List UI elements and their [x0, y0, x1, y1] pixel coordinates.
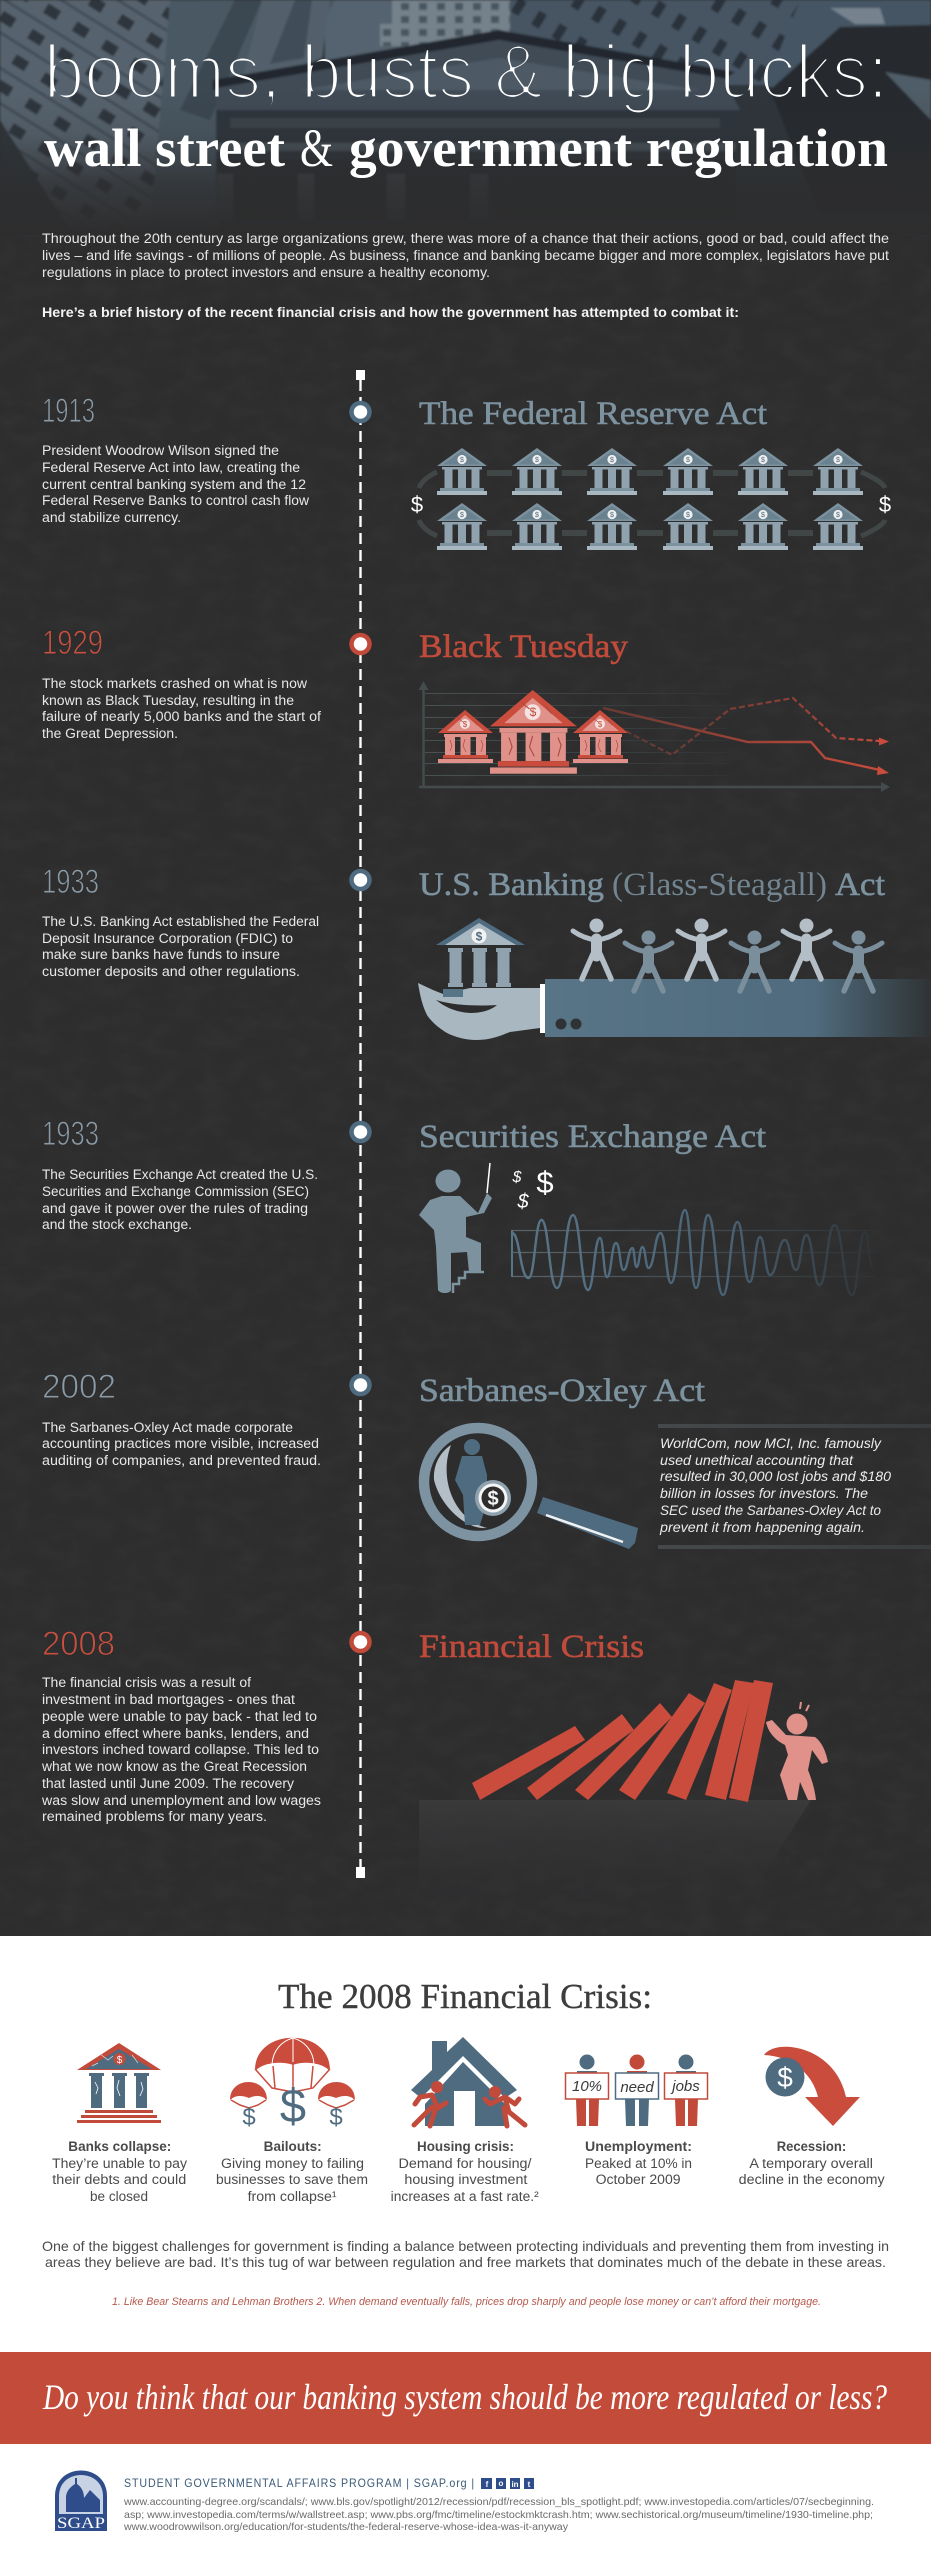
icon: bailouts parachutes: $ — [280, 2079, 306, 2132]
icon: ring of twelve reserve banks: $ — [535, 457, 539, 464]
sources — [123, 2496, 874, 2533]
heading: (Glass-Steagall) — [612, 867, 827, 903]
description: the Great Depression. — [42, 726, 178, 741]
description: failure of nearly 5,000 banks and the start of — [42, 709, 321, 724]
title — [44, 30, 888, 178]
timeline node — [352, 403, 370, 421]
description: investment in bad mortgages - ones that — [42, 1692, 295, 1707]
ledge — [419, 1800, 811, 1920]
year: 1913 — [42, 392, 95, 430]
description: President Woodrow Wilson signed the — [42, 443, 279, 458]
cuff — [540, 984, 545, 1033]
description: Federal Reserve Banks to control cash flow — [42, 493, 309, 508]
callout: WorldCom: SEC used the Sarbanes-Oxley Act to — [660, 1503, 881, 1518]
description: The financial crisis was a result of — [42, 1675, 251, 1690]
text: recession — [739, 2139, 885, 2187]
chart: stock market crash: $ — [463, 720, 468, 729]
callout: WorldCom: billion in losses for investors. The — [660, 1486, 868, 1501]
description: remained problems for many years. — [42, 1809, 267, 1824]
intro text: regulations in place to protect investors and ensure a healthy economy. — [42, 264, 490, 280]
wave chart — [511, 1210, 875, 1295]
icon: recession arrow — [764, 2047, 860, 2126]
text: banks collapse: They’re unable to pay — [52, 2156, 187, 2171]
callout: WorldCom — [658, 1424, 931, 1549]
icon: ring of twelve reserve banks: $ — [836, 512, 840, 519]
icon: bailouts parachutes — [230, 2038, 355, 2132]
icon: ring of twelve reserve banks: $ — [686, 457, 690, 464]
chart: stock market crash: $ — [530, 705, 537, 719]
callout: WorldCom: resulted in 30,000 lost jobs and $180 — [660, 1469, 892, 1484]
description: a domino effect where banks, lenders, and — [42, 1726, 309, 1741]
dominoes — [472, 1680, 773, 1802]
description: and stabilize currency. — [42, 510, 181, 525]
hand — [418, 983, 540, 1040]
closing paragraph — [42, 2238, 889, 2270]
icon: unemployment signs — [566, 2054, 708, 2126]
timeline node — [352, 1123, 370, 1141]
description: investors inched toward collapse. This led to — [42, 1742, 319, 1757]
icon: ring of twelve reserve banks: $ — [460, 512, 464, 519]
heading: Financial Crisis — [419, 1629, 644, 1665]
description: Securities and Exchange Commission (SEC) — [42, 1184, 309, 1199]
icon: regulator pointing at chart: $ — [536, 1165, 554, 1200]
icon: bailouts parachutes: $ — [329, 2104, 343, 2131]
social icons: t — [528, 2480, 531, 2489]
timeline node — [352, 635, 370, 653]
description: Federal Reserve Act into law, creating the — [42, 460, 300, 475]
icon: ring of twelve reserve banks: $ — [411, 492, 423, 517]
text: bailouts: Giving money to failing — [221, 2156, 364, 2171]
text: housing crisis — [391, 2139, 539, 2204]
text: bailouts: businesses to save them — [216, 2172, 368, 2187]
title line 2: wall street — [44, 118, 285, 178]
panel: 1933 U.S. Banking Act — [42, 863, 931, 1040]
section title: The 2008 Financial Crisis: — [278, 1977, 652, 2016]
text: banks collapse: be closed — [90, 2189, 148, 2204]
heading: Act — [835, 867, 885, 903]
panel: 2002 Sarbanes-Oxley Act — [42, 1368, 931, 1549]
footer heading: STUDENT GOVERNMENTAL AFFAIRS PROGRAM | SGAP.org | — [124, 2476, 475, 2490]
social icons: f — [486, 2480, 489, 2489]
timeline node — [352, 1376, 370, 1394]
description — [42, 676, 321, 741]
panel: 1913 Federal Reserve Act — [42, 392, 891, 550]
icon: magnifying glass: $ — [487, 1488, 499, 1510]
description: that lasted until June 2009. The recovery — [42, 1776, 294, 1791]
description: accounting practices more visible, increased — [42, 1436, 319, 1451]
panel: 2008 Financial Crisis — [41, 1625, 828, 1920]
description — [41, 1675, 321, 1824]
description: and the stock exchange. — [42, 1217, 192, 1232]
text: housing crisis: Demand for housing/ — [398, 2156, 532, 2171]
texture — [0, 0, 931, 1936]
running people — [414, 2082, 525, 2126]
text: bailouts — [216, 2139, 368, 2204]
icon: ring of twelve reserve banks: $ — [535, 512, 539, 519]
text: recession: Recession: — [777, 2139, 846, 2154]
description — [42, 443, 309, 525]
text: unemployment — [585, 2139, 692, 2187]
description — [42, 1420, 321, 1468]
title line 2: & — [300, 118, 333, 178]
timeline node — [352, 1633, 370, 1651]
callout: WorldCom: used unethical accounting that — [660, 1453, 854, 1468]
title line 2: government regulation — [349, 118, 888, 178]
heading: Black Tuesday — [419, 629, 629, 665]
person pushing back — [766, 1702, 828, 1800]
icon: recession arrow: $ — [777, 2062, 793, 2093]
description: The Sarbanes-Oxley Act made corporate — [42, 1420, 293, 1435]
description: The Securities Exchange Act created the U.S. — [42, 1167, 318, 1182]
text: bailouts: from collapse¹ — [248, 2189, 337, 2204]
description: known as Black Tuesday, resulting in the — [42, 693, 294, 708]
icon: arm holding bank and people — [418, 918, 931, 1040]
people — [573, 918, 830, 979]
icon: banks collapse — [77, 2043, 161, 2123]
text: banks collapse: their debts and could — [52, 2172, 186, 2187]
header photo: Wall Street buildings — [0, 0, 931, 235]
intro text — [42, 230, 889, 280]
sources: www.accounting-degree.org/scandals/; www.bls.gov/spotlight/2012/recession/pdf/recession_bls_spotlight.pdf; www.investopedia.com/articles/07/secbeginning. — [123, 2496, 874, 2508]
title line 2 — [44, 118, 888, 178]
description: people were unable to pay back - that led to — [42, 1709, 317, 1724]
description: The stock markets crashed on what is now — [42, 676, 307, 691]
description: customer deposits and other regulations. — [42, 964, 300, 979]
text: unemployment: Peaked at 10% in — [585, 2156, 692, 2171]
description: and gave it power over the rules of trading — [42, 1201, 308, 1216]
intro text: lives – and life savings - of millions of people. As business, finance and banking became bigger and more complex, legislators have put — [42, 247, 889, 263]
icon: regulator pointing at chart — [419, 1163, 554, 1293]
text: banks collapse — [52, 2139, 187, 2204]
description: The U.S. Banking Act established the Federal — [42, 914, 319, 929]
icon: magnifying glass — [424, 1428, 638, 1549]
bank on hand: $ — [476, 930, 483, 944]
question banner — [0, 2352, 931, 2444]
heading — [419, 867, 885, 903]
footer logo: SGAP: SGAP — [57, 2515, 105, 2532]
text: recession: decline in the economy — [739, 2172, 885, 2187]
sources: www.woodrowwilson.org/education/for-students/the-federal-reserve-whose-idea-was-it-anyway — [123, 2521, 569, 2533]
footnotes: 1. Like Bear Stearns and Lehman Brothers 2. When demand eventually falls, prices drop sharply and people lose money or can’t afford their mortgage. — [112, 2296, 821, 2308]
description — [42, 1167, 318, 1232]
dark background — [0, 0, 931, 1936]
chart: stock market crash: $ — [598, 720, 603, 729]
year: 1929 — [42, 624, 103, 662]
white section background — [0, 1936, 931, 2560]
icon: housing crisis — [411, 2037, 525, 2126]
description: auditing of companies, and prevented fraud. — [42, 1453, 321, 1468]
footer logo: SGAP — [55, 2470, 107, 2532]
text: unemployment: October 2009 — [596, 2172, 681, 2187]
title line 1: booms, busts & big bucks: — [44, 30, 888, 115]
text: recession: A temporary overall — [749, 2156, 873, 2171]
closing paragraph: One of the biggest challenges for government is finding a balance between protecting individuals and preventing them from investing in — [42, 2238, 889, 2254]
chart: stock market crash — [418, 681, 890, 792]
social icons: in — [511, 2480, 519, 2489]
heading: U.S. Banking — [419, 867, 604, 903]
intro lead-in: Here’s a brief history of the recent financial crisis and how the government has attempted to combat it: — [42, 304, 739, 320]
timeline node — [352, 871, 370, 889]
icon: regulator pointing at chart: $ — [516, 1191, 529, 1213]
sources: asp; www.investopedia.com/terms/w/wallstreet.asp; www.pbs.org/fmc/timeline/estockmktcrash.htm; www.sechistorical.org/museum/timeline/1930-timeline.php; — [124, 2509, 873, 2521]
heading: Sarbanes-Oxley Act — [419, 1373, 705, 1409]
icon: regulator pointing at chart: $ — [512, 1169, 523, 1186]
icon: banks collapse: $ — [117, 2055, 123, 2066]
timeline line — [356, 370, 365, 1878]
description: was slow and unemployment and low wages — [41, 1793, 321, 1808]
crisis descriptions — [52, 2139, 885, 2204]
text: housing crisis: increases at a fast rate.² — [391, 2189, 539, 2204]
year: 1933 — [42, 863, 99, 901]
icon: ring of twelve reserve banks: $ — [610, 457, 614, 464]
description: Deposit Insurance Corporation (FDIC) to — [42, 931, 293, 946]
heading: The Federal Reserve Act — [419, 396, 767, 432]
text: unemployment: Unemployment: — [585, 2139, 692, 2154]
year: 2002 — [42, 1368, 116, 1406]
heading: Securities Exchange Act — [419, 1119, 766, 1155]
icon: ring of twelve reserve banks: $ — [761, 512, 765, 519]
sleeve — [545, 979, 931, 1037]
panel: 1933 Securities Exchange Act — [42, 1115, 875, 1295]
bank on hand — [436, 918, 525, 997]
callout: WorldCom: WorldCom, now MCI, Inc. famously — [660, 1436, 882, 1451]
icon: unemployment signs: jobs — [670, 2078, 700, 2095]
closing paragraph: areas they believe are bad. It’s this tug of war between regulation and free markets that dominates much of the debate in these areas. — [45, 2254, 886, 2270]
icon: ring of twelve reserve banks: $ — [879, 492, 891, 517]
panel: 1929 Black Tuesday — [42, 624, 890, 792]
icon: ring of twelve reserve banks — [411, 448, 891, 550]
callout: WorldCom: prevent it from happening again. — [659, 1520, 865, 1535]
description: current central banking system and the 12 — [42, 477, 306, 492]
description: make sure banks have funds to insure — [42, 947, 280, 962]
illustration: falling dominoes — [419, 1680, 828, 1920]
icon: ring of twelve reserve banks: $ — [761, 457, 765, 464]
icon: ring of twelve reserve banks: $ — [610, 512, 614, 519]
icon: ring of twelve reserve banks: $ — [460, 457, 464, 464]
text: bailouts: Bailouts: — [264, 2139, 322, 2154]
icon: unemployment signs: need — [620, 2079, 654, 2096]
description — [42, 914, 319, 979]
description: what we now know as the Great Recession — [41, 1759, 307, 1774]
icon: unemployment signs: 10% — [572, 2078, 602, 2095]
intro text: Throughout the 20th century as large organizations grew, there was more of a chance that their actions, good or bad, could affect the — [42, 230, 889, 246]
social icons: o — [499, 2479, 504, 2488]
icon: ring of twelve reserve banks: $ — [686, 512, 690, 519]
social icons — [481, 2478, 534, 2489]
text: banks collapse: Banks collapse: — [68, 2139, 171, 2154]
text: housing crisis: housing investment — [404, 2172, 528, 2187]
year: 2008 — [42, 1625, 115, 1663]
icon: bailouts parachutes: $ — [242, 2104, 256, 2131]
text: housing crisis: Housing crisis: — [417, 2139, 514, 2154]
icon: ring of twelve reserve banks: $ — [836, 457, 840, 464]
year: 1933 — [42, 1115, 99, 1153]
